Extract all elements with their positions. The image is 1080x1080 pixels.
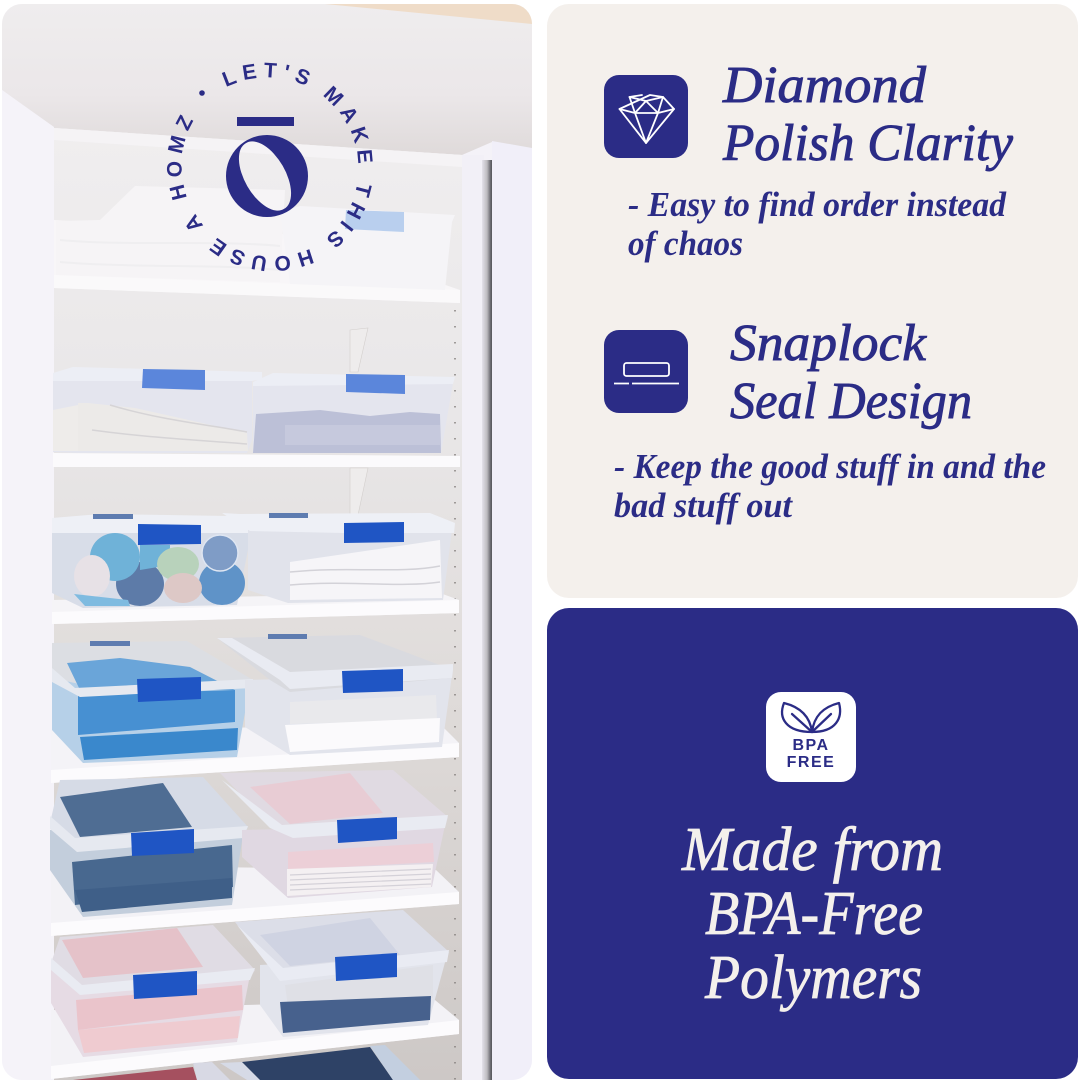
heading: Diamond Polish Clarity: Diamond xyxy=(722,57,927,114)
text: easy to find order xyxy=(628,185,1006,263)
shelf 6 xyxy=(51,1000,459,1079)
icon: diamond xyxy=(604,75,688,158)
icon: BPA free badge: FREE xyxy=(787,754,835,771)
icon: BPA free badge: BPA xyxy=(792,737,830,754)
peach wall corner xyxy=(325,4,532,24)
bin: shelf 5 right with pink cloth xyxy=(220,770,448,898)
heading: made from BPA-free polymers xyxy=(681,816,943,1012)
shelf 3 xyxy=(52,593,459,624)
heading: made from BPA-free polymers: Made from xyxy=(681,816,943,884)
shelf brackets xyxy=(350,328,368,515)
shelf 5 xyxy=(51,865,459,936)
bin: shelf 5 left with navy cloth xyxy=(50,777,248,917)
bin: shelf 3 left with rolled cloth xyxy=(52,514,253,608)
logo bar xyxy=(237,117,294,126)
shelf 4 xyxy=(51,725,459,783)
logo: circular brand text xyxy=(166,62,373,272)
bin: shelf 2 right xyxy=(253,373,455,453)
panel: BPA free xyxy=(547,608,1078,1079)
bin: shelf 4 left with blue cloth xyxy=(52,641,253,763)
panel: features xyxy=(547,4,1078,598)
heading: made from BPA-free polymers: BPA-Free xyxy=(705,880,923,948)
right door frame xyxy=(482,141,532,1080)
heading: made from BPA-free polymers: Polymers xyxy=(704,944,922,1012)
bins on bottom shelf xyxy=(73,1045,420,1080)
text: easy to find order: of chaos xyxy=(628,224,743,263)
separator dot xyxy=(199,90,205,96)
cabinet top rim xyxy=(54,128,462,167)
bin: shelf 4 right with white cloth xyxy=(217,634,453,755)
left side panel xyxy=(12,98,54,128)
towels on shelf 1 xyxy=(60,186,284,271)
heading: Snaplock Seal Design: Seal Design xyxy=(730,373,972,430)
shelf pin holes xyxy=(454,310,456,1080)
text: keep the good stuff: - Keep the good stuff in and the xyxy=(614,447,1046,486)
text: easy to find order: - Easy to find order instead xyxy=(628,185,1006,224)
bin on shelf 1 xyxy=(280,206,455,290)
back wall xyxy=(54,128,462,1080)
bin: shelf 3 right with white cloth xyxy=(222,513,455,603)
bin: shelf 2 left xyxy=(53,367,262,453)
heading: Snaplock Seal Design xyxy=(730,315,972,430)
ceiling xyxy=(2,4,532,155)
logo ring xyxy=(226,135,308,217)
circular slogan: LET'S MAKE THIS HOUSE A HOMZ xyxy=(166,62,373,272)
heading: Diamond Polish Clarity xyxy=(722,57,1014,172)
heading: Snaplock Seal Design: Snaplock xyxy=(730,315,927,372)
panel: shelf photo xyxy=(2,4,532,1080)
shelf 1 xyxy=(54,220,460,303)
icon: BPA free badge xyxy=(766,692,856,782)
shelf 2 xyxy=(53,453,460,467)
bin: shelf 6 left with pink cloth xyxy=(51,925,255,1057)
text: keep the good stuff: bad stuff out xyxy=(614,486,793,525)
icon: snaplock xyxy=(604,330,688,413)
heading: Diamond Polish Clarity: Polish Clarity xyxy=(722,115,1014,172)
bin: shelf 6 right with striped and navy cloth xyxy=(235,910,449,1037)
text: keep the good stuff xyxy=(614,447,1046,525)
